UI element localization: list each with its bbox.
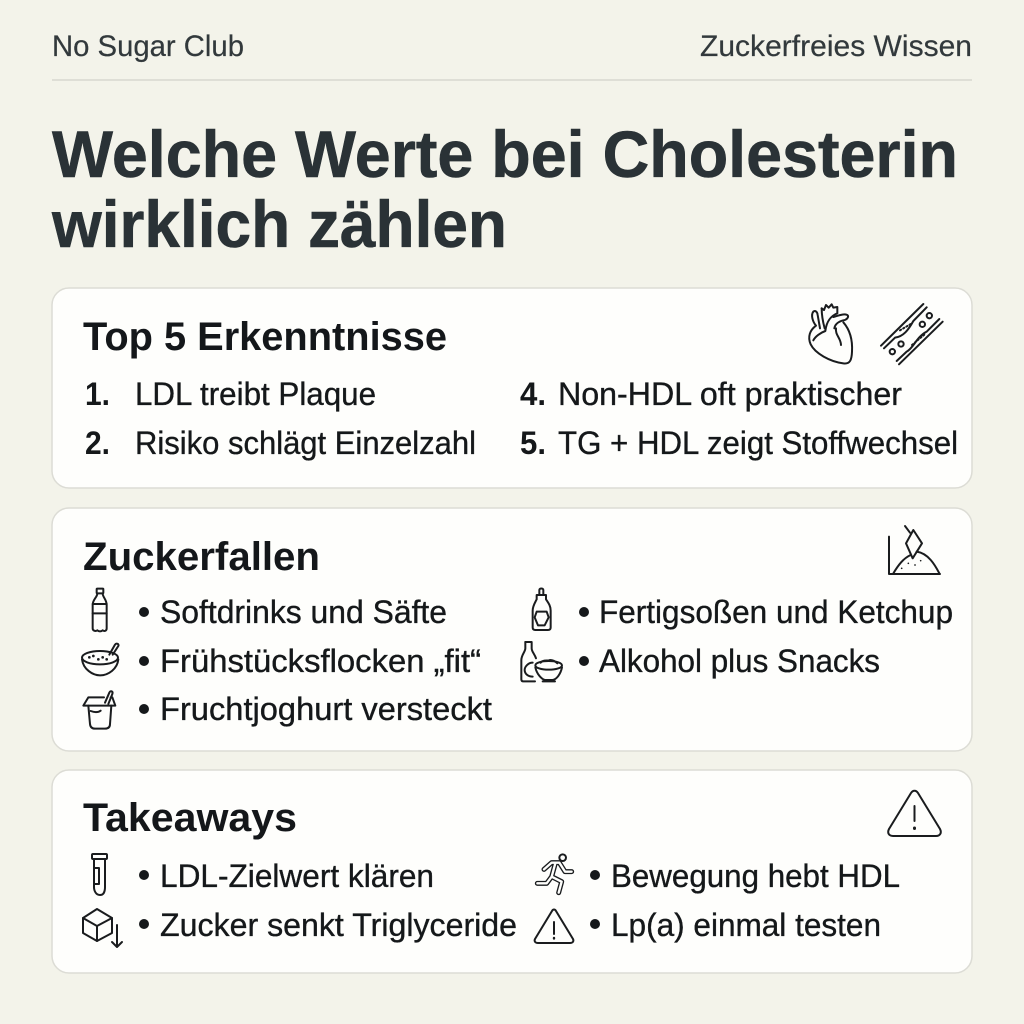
icon: ketchup bottle [533,588,551,630]
panel: Zuckerfallen [52,508,972,751]
icon: artery with plaque [881,304,943,364]
brand name: No Sugar Club [52,30,244,63]
panel: Top 5 Erkenntnisse [52,288,972,488]
list: findings left column: 1. [85,376,110,412]
icon: heart [809,304,852,363]
list: findings right column [520,376,958,461]
icon: bottle and snack bowl [521,642,562,681]
list: sugar traps left column [139,594,492,727]
heading: Top 5 Erkenntnisse: Top 5 Erkenntnisse [83,315,447,359]
icon: warning triangle large [888,791,941,836]
list: sugar traps right column [579,594,953,679]
icon: sugar cube with down arrow [83,909,122,947]
icon: running person [537,854,572,893]
list: takeaways right column: Lp(a) einmal testen [611,907,881,943]
icon: cereal bowl [82,644,119,675]
list: sugar traps right column: Fertigsoßen und Ketchup [599,594,953,630]
list: findings right column: Non-HDL oft praktischer [558,376,902,412]
title: wirklich zählen [51,187,507,261]
panel: Takeaways [52,770,972,973]
list: findings right column: 4. [520,376,546,412]
list: findings left column [85,376,476,461]
heading: Zuckerfallen: Zuckerfallen [83,535,320,579]
list: sugar traps right column: Alkohol plus Snacks [599,643,880,679]
title [51,117,958,261]
icon: fruit yoghurt cup [83,691,115,729]
list: takeaways right column [590,858,900,943]
list: sugar traps left column: Softdrinks und Säfte [160,594,447,630]
header [52,30,972,80]
list: findings right column: 5. [520,425,546,461]
icon: test tube [92,854,107,895]
list: takeaways left column: Zucker senkt Triglyceride [160,907,517,943]
icon: sugar pile [889,526,940,574]
title: Welche Werte bei Cholesterin [52,117,958,191]
heading: Takeaways: Takeaways [83,796,297,840]
list: findings right column: TG + HDL zeigt Stoffwechsel [558,425,958,461]
list: takeaways left column: LDL-Zielwert klären [160,858,434,894]
list: takeaways right column: Bewegung hebt HDL [611,858,900,894]
list: sugar traps left column: Fruchtjoghurt versteckt [160,691,492,727]
list: takeaways left column [139,858,517,943]
list: findings left column: 2. [85,425,110,461]
icon: warning triangle small [535,910,573,943]
list: findings left column: LDL treibt Plaque [135,376,376,412]
icon: soft drink bottle [93,589,107,631]
list: findings left column: Risiko schlägt Einzelzahl [135,425,476,461]
list: sugar traps left column: Frühstücksflocken „fit“ [160,643,481,679]
section label: Zuckerfreies Wissen [700,30,972,63]
